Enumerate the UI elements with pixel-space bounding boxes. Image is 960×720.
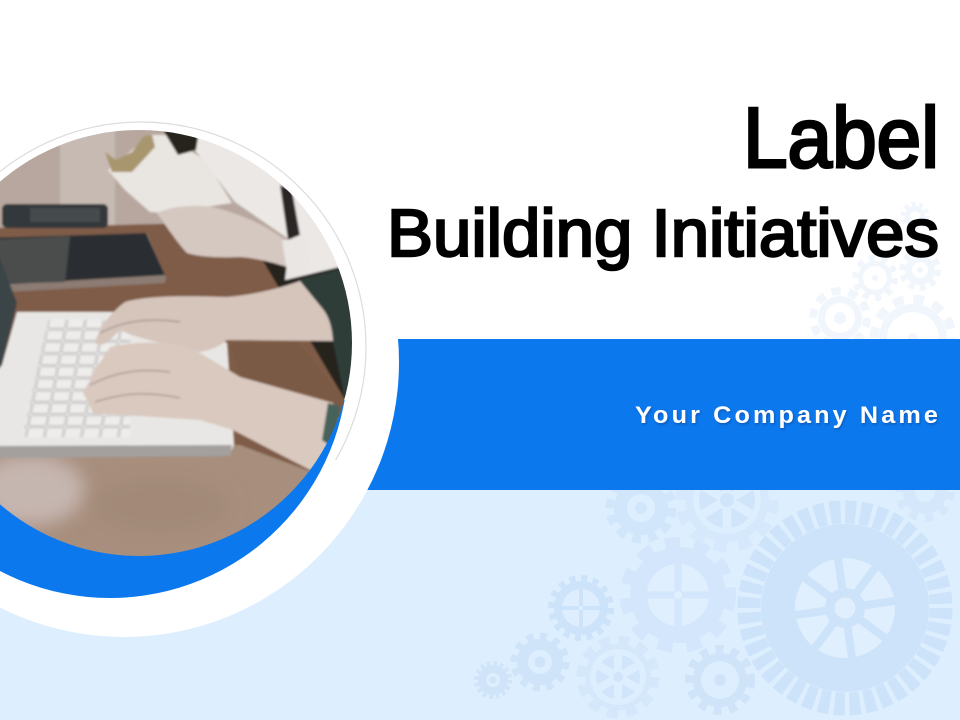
- upper faded gears decoration: [813, 204, 952, 377]
- upper background hand: [157, 206, 290, 268]
- light blue lower section: [0, 490, 960, 720]
- gear: top centre of lower area: [680, 453, 774, 547]
- company name: Your Company Name: [635, 402, 941, 429]
- thin grey ring: [0, 122, 366, 460]
- blue crescent: [0, 400, 345, 598]
- wooden table: [0, 222, 345, 472]
- laptop body: [0, 312, 234, 455]
- tablet: [0, 233, 166, 293]
- lower gears decoration: [476, 453, 951, 714]
- white sleeve with gold bracelet: [108, 135, 232, 213]
- phone: [2, 204, 108, 228]
- gear: serrated lower centre: [689, 649, 751, 711]
- gear: serrated left: [514, 636, 566, 688]
- lower wood tone: [0, 445, 320, 560]
- gear: medium four spoke: [626, 543, 730, 647]
- laptop screen: [0, 255, 17, 380]
- blue company band: [300, 339, 960, 490]
- gear: smallest far left: [476, 663, 510, 697]
- gear: top left of lower area: [610, 477, 672, 539]
- lower typing hand and arm: [83, 343, 340, 473]
- top typing hand and arm: [95, 281, 333, 352]
- photo backdrop: [0, 130, 289, 241]
- gear: small four spoke: [551, 578, 611, 638]
- patterned green sleeve: [300, 270, 352, 398]
- gear: outlined pale wheel: [581, 640, 655, 714]
- dark table side: [262, 260, 346, 402]
- gear: top right of lower area: [899, 466, 951, 518]
- laptop keyboard: [22, 320, 130, 437]
- circular photo: hands typing on a laptop: [0, 125, 360, 565]
- title: Building Initiatives: Building Initiatives: [387, 196, 939, 271]
- white outer disc: [0, 87, 399, 637]
- title: Label: Label: [743, 91, 939, 186]
- gear: large wheel: [749, 512, 941, 704]
- white shirt behind: [194, 138, 338, 282]
